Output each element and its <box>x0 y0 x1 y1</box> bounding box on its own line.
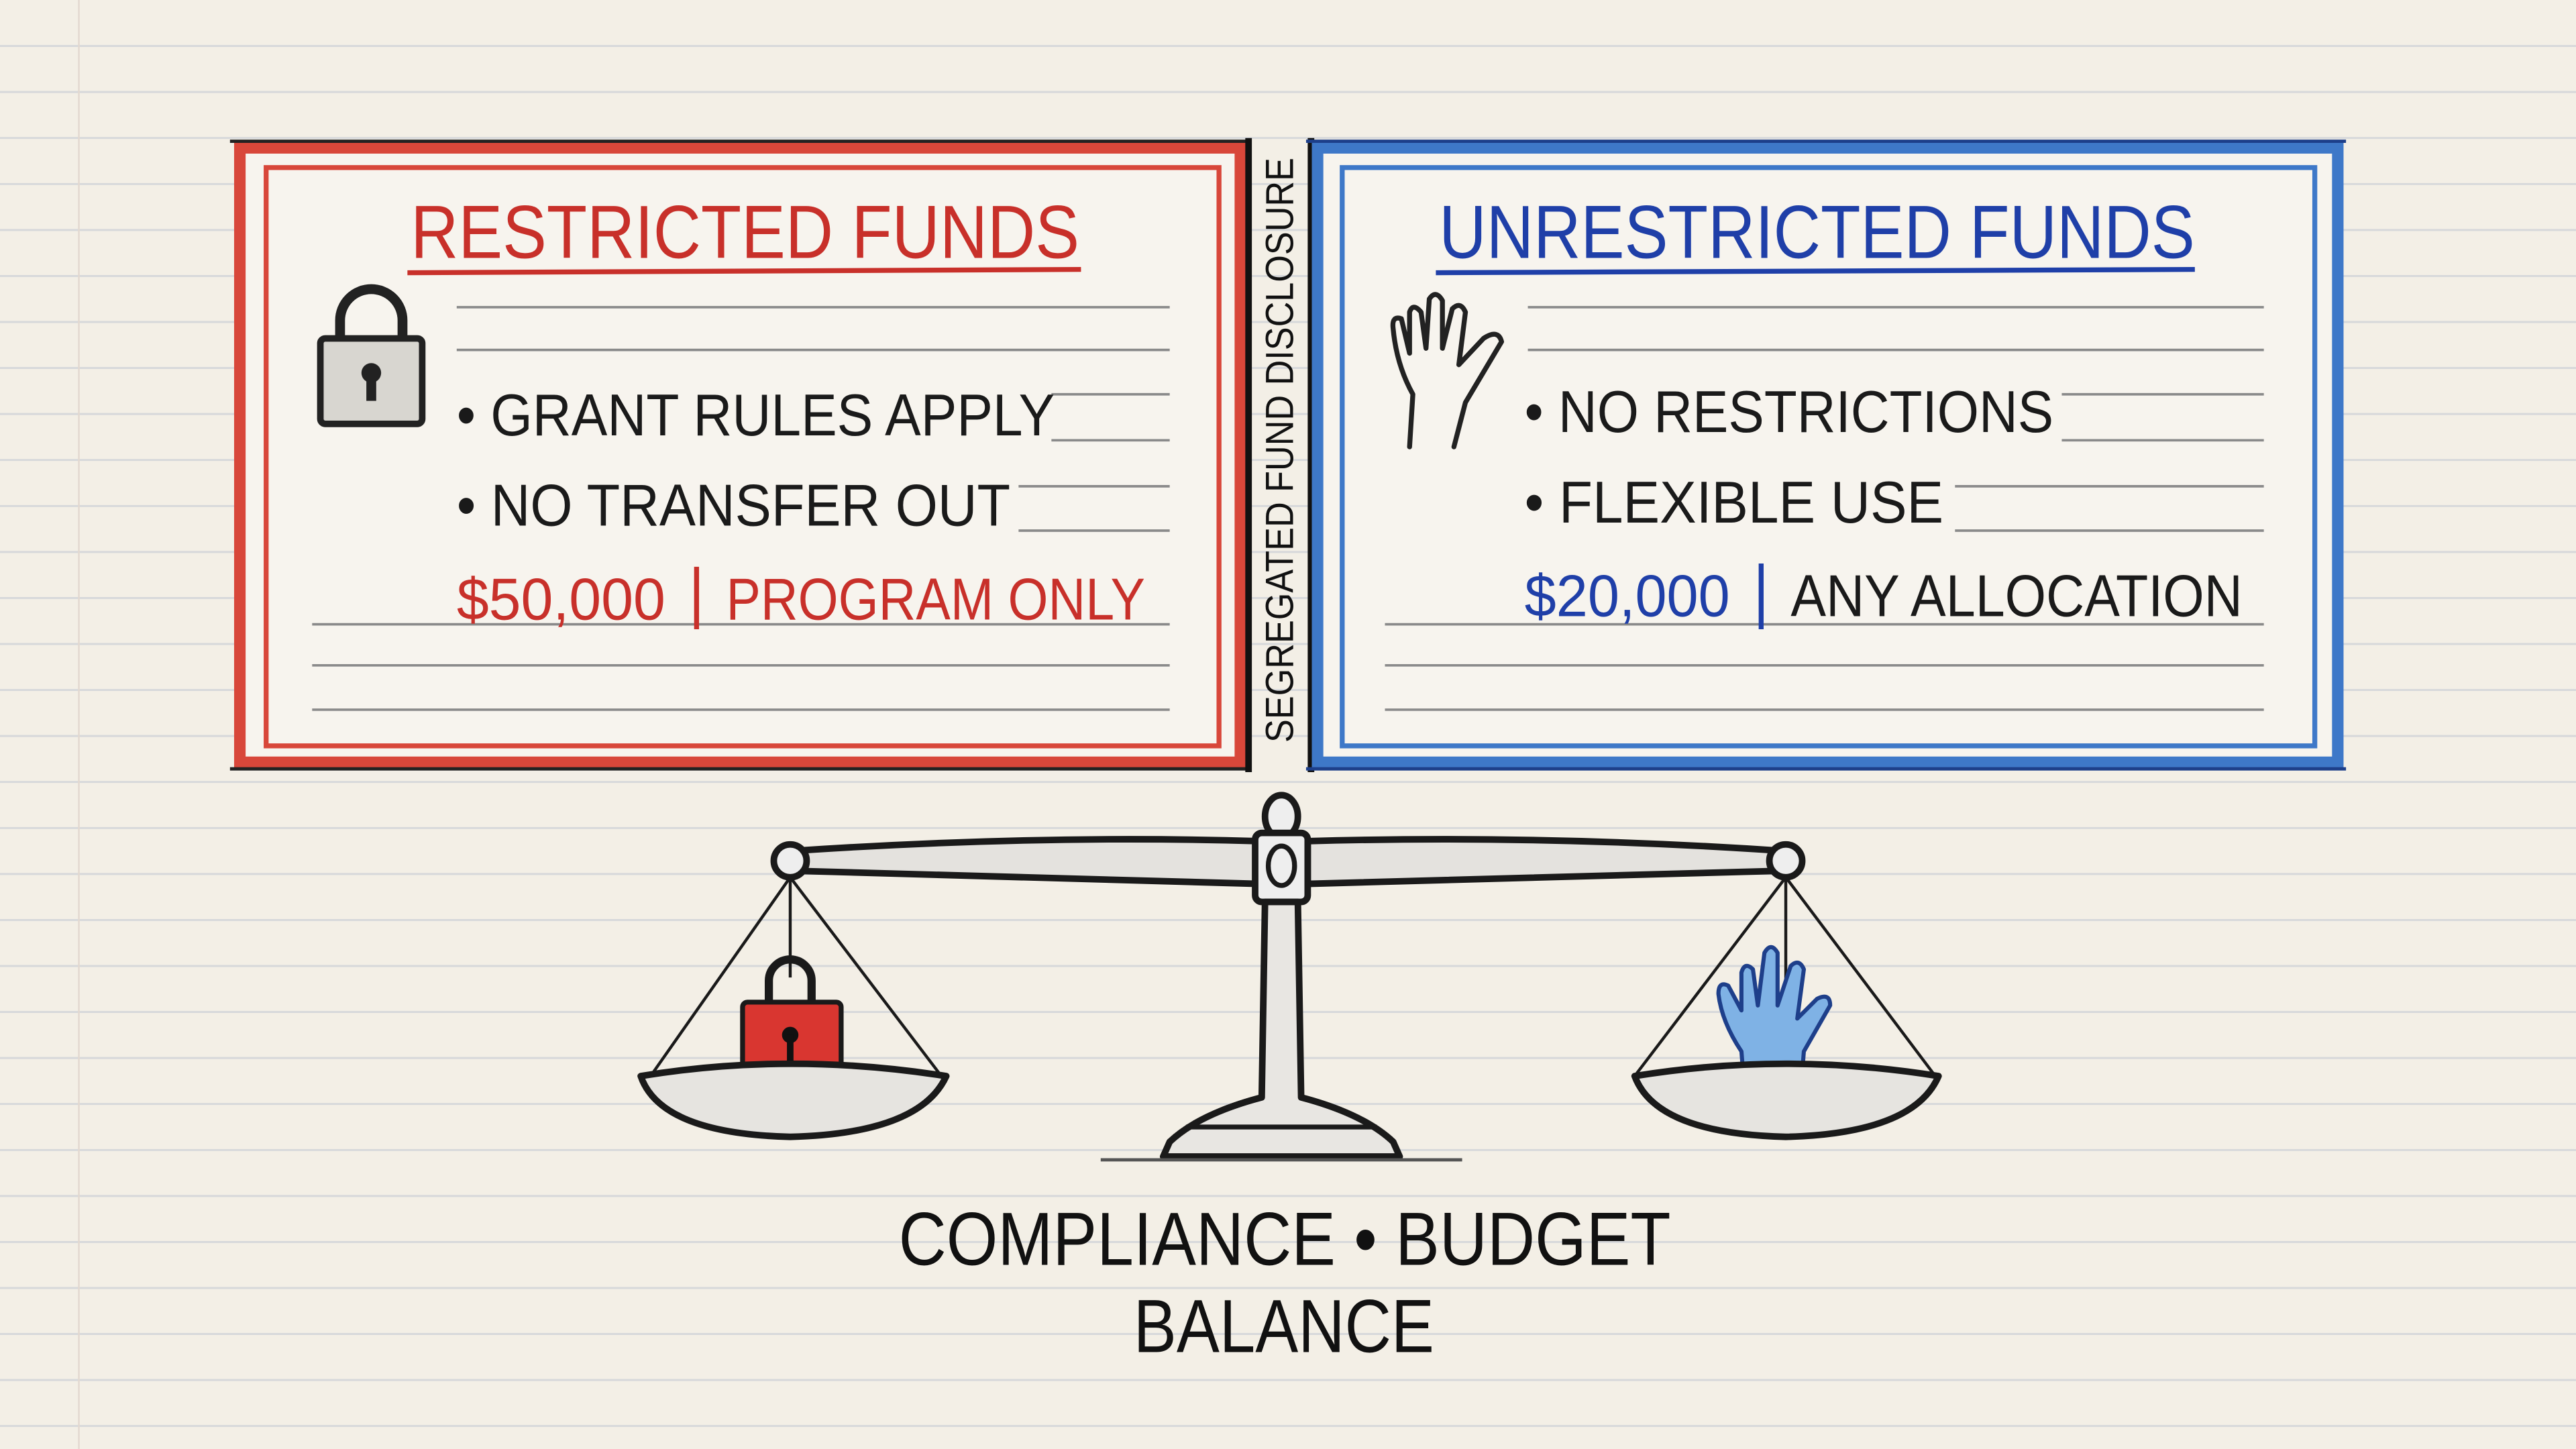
icon: padlock <box>321 289 422 424</box>
caption: compliance budget balance: COMPLIANCE • BUDGET <box>899 1197 1671 1281</box>
heading: restricted funds: RESTRICTED FUNDS <box>411 189 1079 274</box>
icon: open hand <box>1393 294 1501 447</box>
left pan with red lock <box>641 959 947 1137</box>
panel: unrestricted funds <box>1306 142 2346 769</box>
right pan with blue hand <box>1635 947 1939 1137</box>
divider: segregated label: SEGREGATED FUND DISCLOSURE <box>1258 158 1301 743</box>
post and base <box>1163 902 1400 1157</box>
amount: unrestricted: ANY ALLOCATION <box>1790 562 2243 629</box>
strings <box>651 877 1935 1076</box>
caption: compliance budget balance: BALANCE <box>1134 1284 1434 1368</box>
panel: restricted funds: • NO TRANSFER OUT <box>457 472 1010 539</box>
bullets: unrestricted: • NO RESTRICTIONS <box>1525 378 2053 445</box>
bullets: restricted: • GRANT RULES APPLY <box>457 382 1055 448</box>
amount: unrestricted <box>1525 562 2243 629</box>
beam <box>792 839 1258 884</box>
illustration: balance scale <box>641 795 1939 1160</box>
amount: unrestricted: $20,000 <box>1525 562 1730 629</box>
panel: unrestricted funds: • FLEXIBLE USE <box>1525 469 1943 535</box>
amount: restricted: PROGRAM ONLY <box>726 566 1145 632</box>
amount: restricted <box>457 566 1145 632</box>
heading: unrestricted funds: UNRESTRICTED FUNDS <box>1439 189 2195 274</box>
caption: compliance budget balance <box>899 1197 1671 1368</box>
panel: restricted funds <box>230 142 1248 769</box>
amount: restricted: $50,000 <box>457 566 665 632</box>
